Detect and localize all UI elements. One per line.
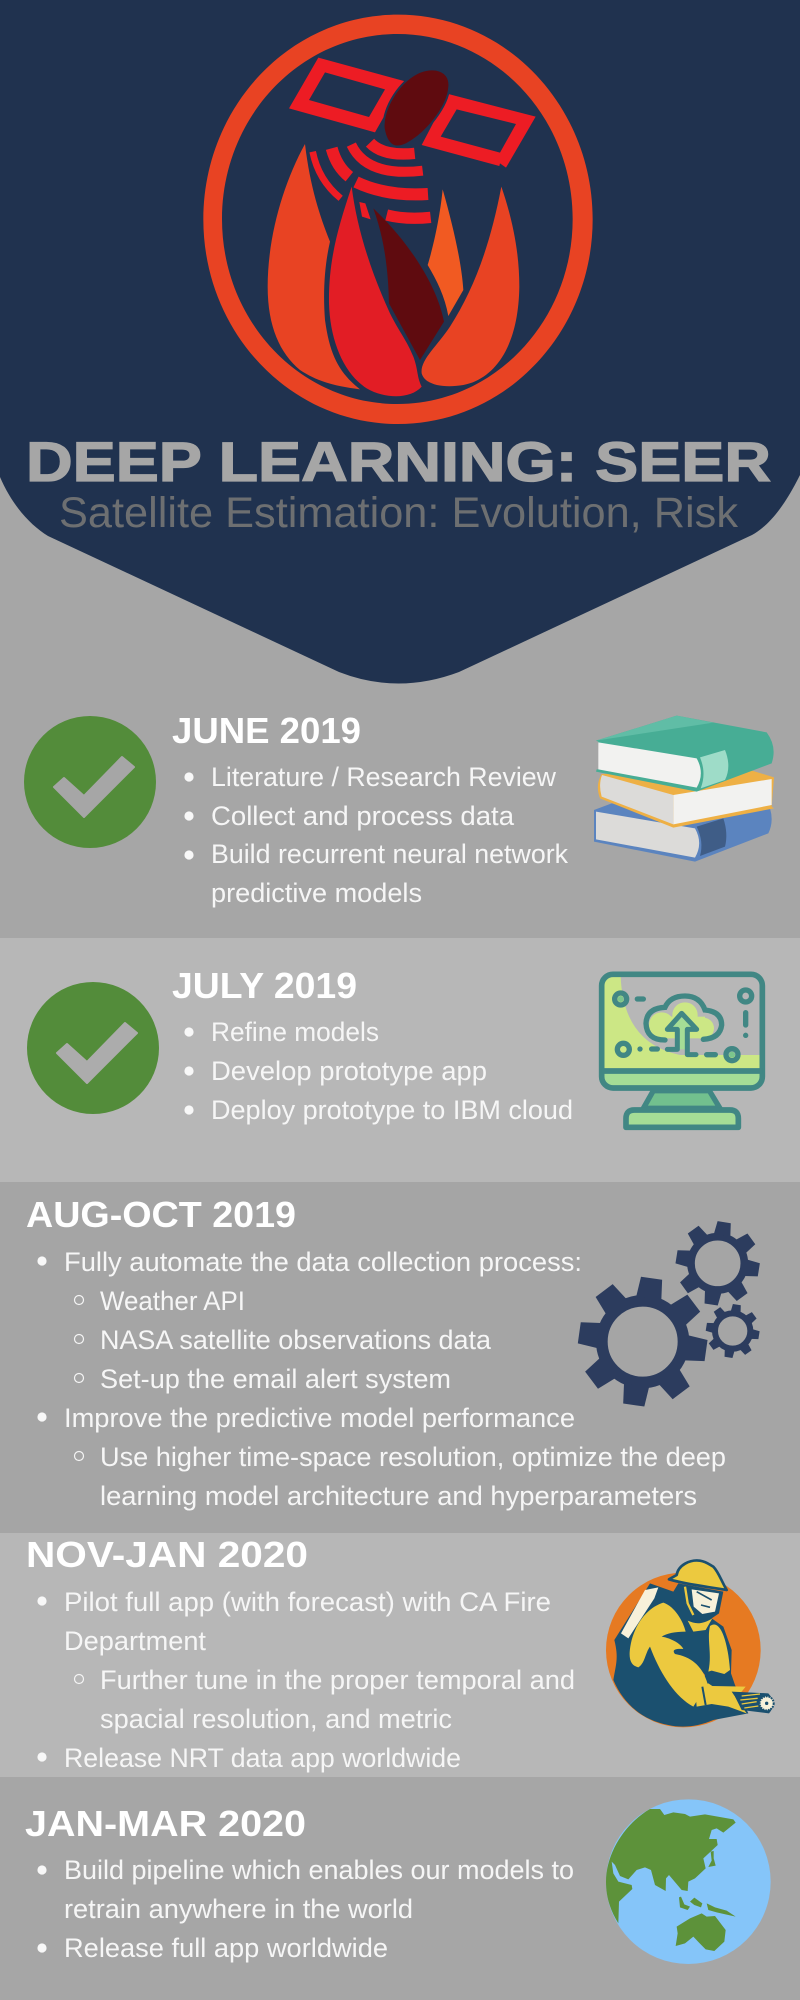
- icon: gears: [578, 1221, 760, 1407]
- bullet list: [37, 1247, 726, 1511]
- bullet list: Pilot full app (with forecast) with CA Fire: [64, 1587, 551, 1617]
- bullet list: Department: [64, 1626, 206, 1656]
- bullet list: spacial resolution, and metric: [100, 1704, 452, 1734]
- bullet list: predictive models: [211, 878, 422, 908]
- title: DEEP LEARNING: SEER: [26, 430, 771, 493]
- bullet list: [184, 762, 568, 908]
- bullet list: Improve the predictive model performance: [64, 1403, 575, 1433]
- bullet list: Release full app worldwide: [64, 1933, 388, 1963]
- icon: green check: [24, 716, 156, 848]
- helmet: [669, 1560, 727, 1590]
- heading: NOV-JAN 2020: [26, 1534, 308, 1575]
- bullet list: Set-up the email alert system: [100, 1364, 451, 1394]
- panel: jan-mar 2020: [0, 1777, 800, 2000]
- bullet list: Deploy prototype to IBM cloud: [211, 1095, 573, 1125]
- bullet list: [37, 1855, 574, 1963]
- subtitle: Satellite Estimation: Evolution, Risk: [59, 489, 738, 537]
- right flame: [422, 187, 519, 386]
- dark flame: [373, 208, 444, 360]
- bullet list: Release NRT data app worldwide: [64, 1743, 461, 1773]
- small orange flame: [428, 189, 463, 316]
- bullet list: learning model architecture and hyperparameters: [100, 1481, 697, 1511]
- bullet list: [184, 1017, 573, 1125]
- icon: green check: [27, 982, 159, 1114]
- logo ring: [203, 15, 593, 424]
- panel: nov-jan 2020: [0, 1533, 800, 1777]
- logo: satellite over flames: [203, 15, 593, 424]
- heading: JAN-MAR 2020: [25, 1803, 306, 1844]
- left solar panel: [289, 58, 404, 132]
- signal waves: [313, 143, 431, 219]
- centre red flame: [329, 187, 422, 396]
- panel: june 2019: [0, 690, 800, 938]
- bullet list: retrain anywhere in the world: [64, 1894, 413, 1924]
- icon: books: [594, 716, 774, 862]
- satellite body: [384, 69, 449, 147]
- bullet list: Refine models: [211, 1017, 379, 1047]
- right solar panel: [422, 94, 536, 168]
- bullet list: Use higher time-space resolution, optimize the deep: [100, 1442, 726, 1472]
- icon: monitor with cloud upload: [601, 974, 763, 1127]
- heading: AUG-OCT 2019: [26, 1194, 296, 1235]
- bullet list: Further tune in the proper temporal and: [100, 1665, 575, 1695]
- icon: firefighter: [606, 1560, 774, 1727]
- panel: july 2019: [0, 938, 800, 1182]
- bullet list: [37, 1587, 575, 1773]
- bullet list: Literature / Research Review: [211, 762, 556, 792]
- bullet list: Collect and process data: [211, 801, 515, 831]
- heading: JULY 2019: [172, 965, 357, 1006]
- header banner: [0, 0, 800, 684]
- bullet list: NASA satellite observations data: [100, 1325, 492, 1355]
- panel: aug-oct 2019: [0, 1182, 800, 1533]
- bullet list: Weather API: [100, 1286, 245, 1316]
- bullet list: Build pipeline which enables our models to: [64, 1855, 574, 1885]
- bullet list: Fully automate the data collection process:: [64, 1247, 582, 1277]
- bullet list: Develop prototype app: [211, 1056, 487, 1086]
- bullet list: Build recurrent neural network: [211, 839, 568, 869]
- icon: globe: [606, 1799, 771, 1964]
- left flame: [268, 144, 360, 389]
- heading: JUNE 2019: [172, 710, 361, 751]
